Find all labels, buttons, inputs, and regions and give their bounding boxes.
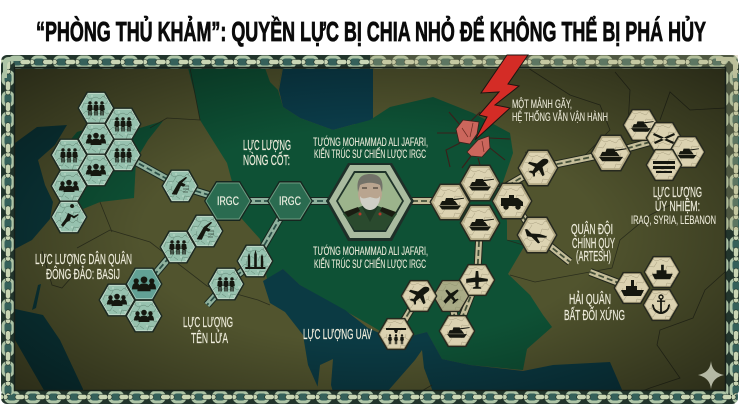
hex: jet 2 xyxy=(517,217,557,253)
panel: UAV force xyxy=(378,264,495,350)
panel: Basij militia network xyxy=(51,92,223,332)
land: Qatar and UAE xyxy=(317,350,433,392)
node: IRGC 2 xyxy=(267,181,313,221)
hex: runner xyxy=(51,201,87,233)
hex: tank 1 xyxy=(460,165,500,201)
portrait: commander xyxy=(326,163,414,241)
hex: armoured vehicle xyxy=(492,183,532,219)
broken fragments xyxy=(437,112,510,168)
label: core forces: NÒNG CỐT: xyxy=(243,151,290,169)
chains between nodes xyxy=(123,138,664,334)
label: asymmetric navy xyxy=(564,291,625,324)
panel: asymmetric navy xyxy=(614,256,680,321)
label: proxy forces: ỦY NHIỆM: xyxy=(655,197,700,215)
label: proxy forces xyxy=(631,185,716,227)
label: asymmetric navy: BẤT ĐỐI XỨNG xyxy=(564,306,625,324)
label: commander top: TƯỚNG MOHAMMAD ALI JAFARI, xyxy=(313,134,428,149)
hex: gunboat xyxy=(614,272,650,304)
hex: crossed weapons xyxy=(646,122,682,154)
country borders xyxy=(42,68,725,392)
label: broken piece xyxy=(512,96,608,124)
panel: proxy forces xyxy=(591,109,705,181)
label: proxy forces: LỰC LƯỢNG xyxy=(653,185,702,201)
country: Iran xyxy=(188,68,552,370)
hex: crowd 4 xyxy=(99,284,135,316)
hex: drone faded xyxy=(433,280,469,312)
hex: soldiers 1 xyxy=(160,231,196,263)
hex: people group 2 xyxy=(105,108,141,140)
tan chains xyxy=(396,138,664,334)
sea: Caspian xyxy=(279,68,373,130)
hex: jet 3 xyxy=(401,280,437,312)
hex: people group 4 xyxy=(51,139,87,171)
label: missile force: LỰC LƯỢNG xyxy=(183,315,233,331)
label: missile force: TÊN LỬA xyxy=(191,329,228,347)
hex: sailing ship xyxy=(644,256,680,288)
label: Basij xyxy=(35,251,132,283)
uniform xyxy=(343,206,397,230)
hex: launcher 2 xyxy=(187,215,223,247)
label: broken piece: MỘT MẢNH GÃY, xyxy=(512,96,572,111)
land patch north of Iran xyxy=(265,68,282,90)
label: UAV force: LỰC LƯỢNG UAV xyxy=(303,327,372,343)
panel: regular army nodes xyxy=(430,150,558,253)
hex: tank 3 xyxy=(460,205,500,241)
label: regular army xyxy=(571,221,615,265)
hex: crowd 1 xyxy=(78,123,114,155)
hex: missiles xyxy=(237,245,273,277)
face xyxy=(358,178,382,208)
node: IRGC 1: IRGC xyxy=(217,194,239,208)
hex: crowd 2 xyxy=(78,154,114,186)
label: regular army: QUÂN ĐỘI xyxy=(571,221,613,238)
hex: drone 1 xyxy=(459,264,495,296)
green corridor: Syria and Iraq xyxy=(60,121,163,209)
hex: drone and crew xyxy=(378,318,414,350)
hex: armoured vehicle xyxy=(669,136,705,168)
label: commander bottom: KIẾN TRÚC SƯ CHIẾN LƯỢC IRGC xyxy=(314,256,426,271)
hex: people group 1 xyxy=(78,92,114,124)
label: regular army: CHÍNH QUY xyxy=(572,235,615,252)
sea: Red Sea xyxy=(15,284,83,392)
hex: crowd highlighted xyxy=(126,268,162,300)
hex: launcher 1 xyxy=(162,170,198,202)
hex: soldiers 2 xyxy=(208,268,244,300)
label: commander top xyxy=(313,134,428,161)
hex: jet 1 xyxy=(518,150,558,186)
hex: artillery xyxy=(623,109,659,141)
icon: lightning bolt xyxy=(475,55,528,140)
panel: missile force xyxy=(208,245,273,300)
hex: people group 3 xyxy=(105,139,141,171)
hex: crowd 3 xyxy=(51,170,87,202)
node: IRGC 2: IRGC xyxy=(279,194,301,208)
sea: Mediterranean xyxy=(15,125,67,249)
hex: crowd 5 xyxy=(126,300,162,332)
label: core forces: LỰC LƯỢNG xyxy=(243,138,291,154)
hex: anchor xyxy=(643,289,679,321)
node: IRGC 1 xyxy=(204,181,252,221)
label: core forces xyxy=(243,138,291,169)
label: Basij: ĐÔNG ĐẢO: BASIJ xyxy=(46,266,120,283)
label: missile force xyxy=(183,315,233,347)
label: asymmetric navy: HẢI QUÂN xyxy=(569,291,611,308)
label: commander top: KIẾN TRÚC SƯ CHIẾN LƯỢC IRGC xyxy=(314,146,426,161)
icon: sparkle xyxy=(698,361,724,389)
hex: launchers xyxy=(646,149,682,181)
hex: ship xyxy=(591,135,631,171)
label: commander bottom xyxy=(313,243,428,271)
hex: tank 2 xyxy=(430,184,470,220)
hex: tank 4 xyxy=(439,315,475,347)
label: Basij: LỰC LƯỢNG DÂN QUÂN xyxy=(35,251,132,268)
teal chains xyxy=(123,155,330,305)
label: broken piece: HỆ THỐNG VẪN VẬN HÀNH xyxy=(512,109,608,124)
label: regular army: (ARTESH) xyxy=(576,249,611,265)
sea: Persian Gulf and Gulf of Oman xyxy=(263,269,623,392)
label: commander bottom: TƯỚNG MOHAMMAD ALI JAFARI, xyxy=(313,243,428,258)
